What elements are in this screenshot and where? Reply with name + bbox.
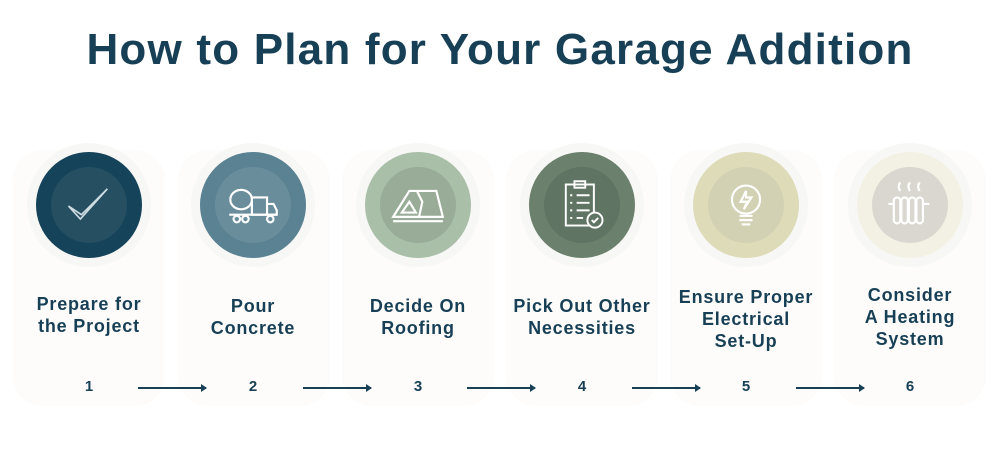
label — [211, 296, 295, 338]
label: System — [876, 329, 944, 349]
label — [679, 287, 813, 351]
label: Electrical — [702, 309, 790, 329]
arrow — [796, 387, 864, 389]
label: Set-Up — [715, 331, 777, 351]
number: 5 — [742, 378, 750, 395]
arrow — [138, 387, 206, 389]
label: Pour — [231, 296, 275, 316]
number: 3 — [414, 378, 422, 395]
step 3 — [365, 143, 471, 395]
icon: lightbulb — [693, 152, 799, 258]
title: How to Plan for Your Garage Addition — [86, 25, 914, 74]
label: Decide On — [370, 296, 466, 316]
icon: concrete truck — [200, 152, 306, 258]
arrow — [467, 387, 535, 389]
icon: checkmark — [36, 152, 142, 258]
label: Roofing — [381, 318, 455, 338]
icon: radiator — [857, 152, 963, 258]
icon: roofing — [365, 152, 471, 258]
label — [37, 294, 141, 336]
step 6 — [857, 143, 963, 395]
label — [513, 296, 651, 338]
icon: clipboard — [529, 152, 635, 258]
label: Concrete — [211, 318, 295, 338]
label — [865, 285, 955, 349]
step 1 — [36, 143, 142, 395]
label: Ensure Proper — [679, 287, 813, 307]
number: 2 — [249, 378, 257, 395]
label: Necessities — [528, 318, 636, 338]
label: Consider — [868, 285, 952, 305]
number: 6 — [906, 378, 914, 395]
number: 1 — [85, 378, 93, 395]
arrow — [303, 387, 371, 389]
label: the Project — [38, 316, 140, 336]
step 4 — [513, 143, 651, 395]
step 5 — [679, 143, 813, 395]
label — [370, 296, 466, 338]
arrow — [632, 387, 700, 389]
number: 4 — [578, 378, 586, 395]
step 2 — [200, 143, 306, 395]
label: A Heating — [865, 307, 955, 327]
label: Prepare for — [37, 294, 141, 314]
label: Pick Out Other — [513, 296, 651, 316]
